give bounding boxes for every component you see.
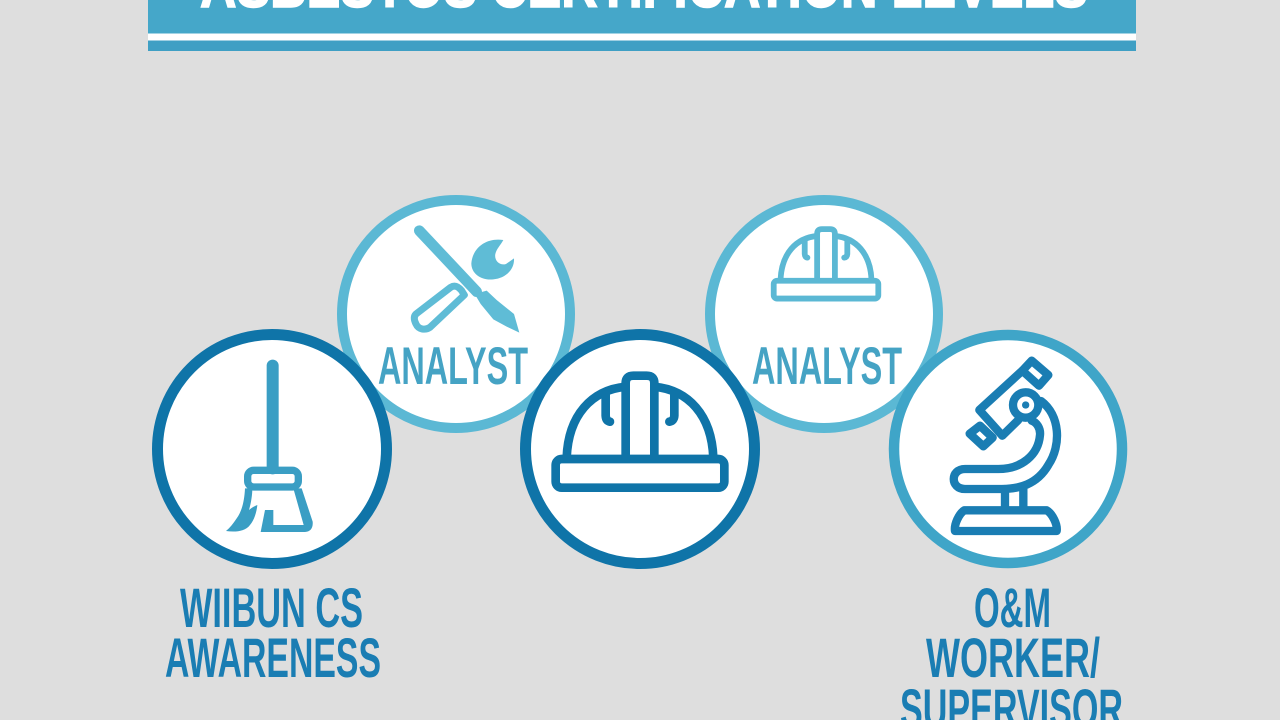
label: awareness level: WIIBUN CS (180, 576, 363, 639)
icon: small hard hat (774, 229, 878, 299)
label: awareness level (165, 576, 381, 689)
panel: analyst with tools (342, 200, 570, 428)
label: O&M worker / supervisor (900, 576, 1123, 720)
label: analyst: ANALYST (752, 337, 902, 396)
header banner (148, 0, 1136, 51)
label: O&M worker / supervisor: WORKER/ (926, 626, 1100, 689)
label: O&M worker / supervisor: O&M (974, 576, 1051, 639)
panel: supervisor microscope (894, 335, 1122, 563)
icon: broom (226, 366, 313, 532)
panel: analyst with hard hat (710, 200, 938, 428)
panel: awareness (158, 334, 386, 564)
icon: microscope (954, 361, 1057, 531)
label: analyst: ANALYST (378, 337, 528, 396)
panel: worker hard hat (526, 334, 754, 564)
icon: hard hat (556, 376, 724, 488)
label: awareness level: AWARENESS (165, 626, 381, 689)
icon: crossed tools (414, 231, 519, 333)
